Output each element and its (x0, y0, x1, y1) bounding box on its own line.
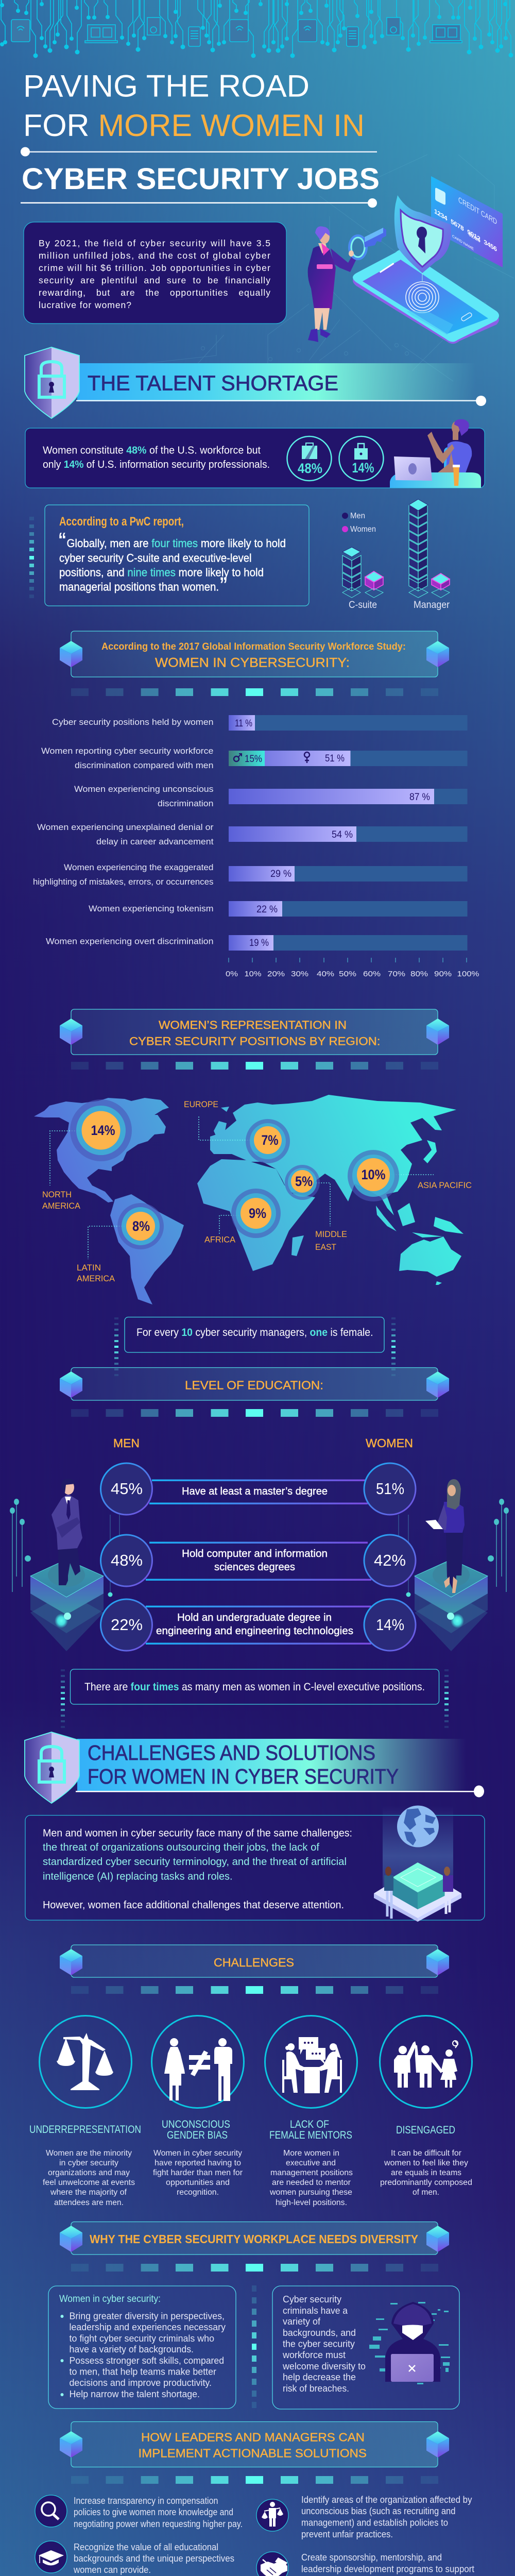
row: workforce discrimination (41, 746, 468, 770)
section heading: challenges and solutions: FOR WOMEN IN CYBER SECURITY (88, 1765, 399, 1788)
action: identify unconscious bias: Identify areas of the organization affected by (301, 2495, 472, 2505)
heading box: how leaders can implement solutions: IMPLEMENT ACTIONABLE SOLUTIONS (138, 2446, 367, 2460)
panel: PwC report quote: Globally, men are four times more likely to hold (67, 537, 286, 550)
education comparison: MEN (113, 1436, 140, 1450)
region labels: ASIA PACIFIC (418, 1180, 472, 1190)
panel: women in cyber security bullets: Bring greater diversity in perspectives, (69, 2311, 225, 2321)
action: compensation transparency (35, 2495, 243, 2529)
panel: workforce statistic (25, 419, 485, 488)
panel: cyber criminals text and hacker: variety of (283, 2316, 321, 2327)
panel: cyber criminals text and hacker: risk of breaches. (283, 2383, 349, 2394)
challenge: unconscious gender bias: fight harder than men for (153, 2168, 243, 2177)
icon: credit card: CARD NAME (452, 234, 474, 251)
row: workforce discrimination: Women reporting cyber security workforce (41, 746, 213, 756)
panel: shared challenges text: However, women face additional challenges that deserve attention. (43, 1900, 344, 1911)
panel: women in cyber security bullets: Women in cyber security: (59, 2294, 161, 2304)
title (21, 69, 380, 208)
row: exaggerated highlighting: highlighting of mistakes, errors, or occurrences (33, 877, 213, 887)
row: workforce discrimination: 15% (245, 754, 262, 765)
callout: North America 14% (70, 1099, 132, 1161)
callout: Latin America 8% (117, 1203, 164, 1249)
callout: North America 14%: 14% (91, 1123, 115, 1138)
icon: unbalanced scales (57, 2033, 113, 2090)
row: tokenism: Women experiencing tokenism (89, 904, 213, 913)
faint hero circuit lines (122, 155, 514, 381)
heading box: women in cybersecurity: According to the 2017 Global Information Security Workforce Study: (101, 641, 406, 652)
callout: Asia Pacific 10%: 10% (362, 1167, 385, 1182)
section heading: the talent shortage: THE TALENT SHORTAGE (88, 371, 338, 395)
row: workforce discrimination: discrimination compared with men (75, 760, 213, 770)
panel: intro text: security are plentiful and sure to be financially (39, 275, 270, 285)
axis (226, 958, 479, 978)
icon: colleagues high-fiving with excluded woman (394, 2041, 458, 2088)
challenge: lack of female mentors: women pursuing these (269, 2188, 352, 2197)
action: sponsorship and mentorship: leadership development programs to support (301, 2564, 474, 2574)
row: computer and information sciences: sciences degrees (214, 1562, 295, 1573)
challenge: underrepresentation: Women are the minority (46, 2149, 132, 2158)
callout: one in ten managers (114, 1317, 396, 1376)
panel: cyber criminals text and hacker: welcome diversity to (282, 2361, 366, 2371)
axis: 0% (226, 970, 238, 978)
row: unconscious discrimination: Women experiencing unconscious (74, 784, 213, 794)
panel: cyber criminals text and hacker (272, 2286, 459, 2409)
illustration: globe over chip with two figures (374, 1805, 461, 1922)
challenge: underrepresentation: organizations and may (48, 2168, 130, 2177)
axis: 70% (388, 970, 405, 978)
panel: cyber criminals text and hacker: Cyber security (283, 2294, 341, 2304)
action: educational backgrounds (35, 2541, 234, 2575)
heading box: why diversity (60, 2222, 449, 2255)
icon: handshake (256, 2552, 288, 2576)
row: overt discrimination (46, 935, 468, 951)
callout: Europe 7% (246, 1119, 290, 1163)
panel: women in cyber security bullets (48, 2286, 236, 2409)
heading box: women in cybersecurity: WOMEN IN CYBERSECURITY: (155, 655, 350, 670)
callout: Asia Pacific 10% (348, 1150, 399, 1201)
heading box: why diversity: WHY THE CYBER SECURITY WORKPLACE NEEDS DIVERSITY (90, 2232, 418, 2246)
callout: one in ten managers: For every 10 cyber security managers, one is female. (136, 1327, 373, 1338)
challenge: underrepresentation: where the majority of (50, 2188, 127, 2197)
panel: cyber criminals text and hacker: help decrease the (283, 2372, 356, 2382)
heading box: level of education (60, 1367, 449, 1400)
icon: shield with keyhole (394, 195, 451, 282)
action: identify unconscious bias: unconscious bias (such as recruiting and (301, 2506, 455, 2516)
circuit board band at top (0, 0, 513, 58)
heading box: how leaders can implement solutions (60, 2421, 449, 2467)
title: CYBER SECURITY JOBS (22, 162, 380, 196)
challenge: disengaged: It can be difficult for (391, 2149, 461, 2158)
panel: intro text: crime will hit $6 trillion. Job opportunities in cyber (39, 263, 270, 273)
row: exaggerated highlighting (33, 862, 468, 887)
challenge: unconscious gender bias: Women in cyber security (153, 2149, 242, 2158)
row: workforce discrimination: 51 % (325, 753, 345, 764)
axis: 90% (434, 970, 452, 978)
row: positions held: Cyber security positions held by women (52, 717, 213, 727)
illustration: woman on platform (415, 1479, 488, 1651)
row: overt discrimination: Women experiencing overt discrimination (46, 937, 213, 946)
row: tokenism: 22 % (256, 904, 278, 915)
axis: 30% (291, 970, 308, 978)
legend: Women (350, 525, 376, 534)
challenge: unconscious gender bias: recognition. (177, 2188, 219, 2197)
heading box: challenges: CHALLENGES (214, 1956, 294, 1969)
challenge: underrepresentation: attendees are men. (54, 2198, 124, 2207)
action: educational backgrounds: Recognize the value of all educational (74, 2542, 218, 2552)
row: exaggerated highlighting: 29 % (270, 869, 291, 879)
illustration: woman holding a key (308, 226, 386, 342)
panel: women in cyber security bullets: Possess stronger soft skills, compared (69, 2355, 224, 2366)
section heading: challenges and solutions (25, 1732, 484, 1803)
region labels: EAST (315, 1242, 336, 1252)
chart: C-suite and manager towers (342, 499, 450, 611)
challenge: disengaged: of men. (413, 2188, 439, 2197)
panel: PwC report quote: positions, and nine times more likely to hold (59, 566, 264, 579)
action: sponsorship and mentorship (256, 2552, 474, 2576)
manager men tower (409, 499, 428, 598)
callout: Europe 7%: 7% (262, 1132, 278, 1148)
heading box: challenges (60, 1945, 449, 1977)
panel: women in cyber security bullets: to fight cyber security criminals who (69, 2333, 214, 2344)
action: compensation transparency: negotiating power when requesting higher pay. (74, 2519, 243, 2529)
legend: Men (350, 512, 365, 520)
icon: woman not equal man (164, 2038, 232, 2101)
title: FOR MORE WOMEN IN (23, 108, 365, 143)
callout: Middle East 5% (285, 1165, 320, 1200)
row: exaggerated highlighting: Women experiencing the exaggerated (64, 862, 213, 872)
illustration: hooded hacker with laptop (369, 2302, 450, 2384)
axis: 100% (457, 970, 479, 978)
region labels: AMERICA (42, 1201, 81, 1211)
challenge: underrepresentation: UNDERREPRESENTATION (29, 2124, 141, 2136)
education comparison: WOMEN (366, 1436, 413, 1450)
row: master's degree: Have at least a master’s degree (182, 1486, 328, 1497)
icon: mentoring meeting with speech bubbles (282, 2037, 342, 2093)
panel: PwC report quote: managerial positions than women. (59, 580, 219, 594)
challenge: disengaged (380, 2015, 472, 2197)
region labels: AMERICA (77, 1274, 115, 1283)
action: compensation transparency: policies to give women more knowledge and (74, 2507, 233, 2517)
side circuit decoration (10, 1499, 509, 1592)
challenge: lack of female mentors: are needed to mentor (272, 2178, 351, 2187)
icon: 14% lock badge: 14% (352, 460, 374, 476)
panel: shared challenges text: intelligence (AI) replacing tasks and roles. (43, 1871, 233, 1883)
row: unconscious discrimination: 87 % (409, 792, 430, 803)
challenge: unconscious gender bias: opportunities and (166, 2178, 230, 2187)
row: unconscious discrimination: discrimination (158, 799, 213, 808)
panel: women in cyber security bullets: have a variety of backgrounds. (69, 2344, 194, 2354)
row: computer and information sciences (101, 1535, 416, 1586)
row: denial or delay: 54 % (332, 829, 353, 840)
panel: workforce statistic: Women constitute 48% of the U.S. workforce but (43, 445, 261, 456)
challenge: lack of female mentors: LACK OF (290, 2119, 329, 2130)
panel: PwC report quote: “ (58, 529, 66, 551)
continents (34, 1095, 464, 1304)
challenge: lack of female mentors (265, 2015, 357, 2207)
panel: women in cyber security bullets: to men, that help teams make better (69, 2367, 216, 2377)
panel: shared challenges text: the threat of organizations outsourcing their jobs, the lack of (43, 1842, 319, 1853)
row: positions held (52, 715, 468, 731)
challenge: disengaged: women to feel like they (384, 2159, 468, 2167)
panel: shared challenges text: standardized cyber security terminology, and the threat of artificial (43, 1856, 347, 1868)
region labels (42, 1099, 472, 1283)
panel: shared challenges text: Men and women in cyber security face many of the same challenges: (43, 1828, 352, 1839)
row: undergraduate engineering (101, 1599, 416, 1651)
axis: 60% (363, 970, 381, 978)
row: denial or delay: delay in career advancement (96, 837, 214, 846)
row: computer and information sciences: Hold computer and information (182, 1548, 328, 1560)
action: educational backgrounds: women can provide. (73, 2565, 151, 2575)
panel: PwC report quote: ” (219, 574, 228, 596)
panel: PwC report quote (29, 505, 309, 606)
panel: shared challenges text (25, 1805, 485, 1922)
panel: intro text: rewarding, but are the opportunities equally (39, 287, 270, 298)
callout: Africa 9% (231, 1189, 281, 1238)
challenge: unconscious gender bias: GENDER BIAS (167, 2129, 228, 2141)
icon: person holding scales (256, 2499, 288, 2531)
challenge: unconscious gender bias: have reported having to (154, 2159, 241, 2167)
C-suite men tower (342, 547, 361, 598)
icon: credit card: 1234 5678 9012 3456 (434, 207, 497, 253)
action: identify unconscious bias (256, 2495, 472, 2539)
panel: intro text: million unfilled jobs, and the cost of global cyber (39, 250, 270, 261)
icon: credit card (431, 176, 503, 267)
callout: four times as many men (61, 1669, 449, 1728)
C-suite women tower (365, 571, 383, 598)
row: positions held: 11 % (235, 718, 252, 729)
world map (34, 1095, 472, 1304)
region labels: MIDDLE (315, 1229, 347, 1239)
challenge: unconscious gender bias (151, 2015, 244, 2197)
illustration: man on platform (30, 1479, 104, 1651)
row: master's degree (101, 1463, 416, 1515)
row: overt discrimination: 19 % (249, 938, 269, 948)
heading box: representation by region: WOMEN’S REPRESENTATION IN (159, 1019, 347, 1031)
row: undergraduate engineering: 22% (111, 1616, 143, 1634)
panel: women in cyber security bullets: leadership and experiences necessary (69, 2322, 226, 2332)
heading box: representation by region (60, 1009, 449, 1055)
panel: cyber criminals text and hacker: workforce must (282, 2350, 346, 2360)
manager women tower (432, 573, 450, 598)
action: sponsorship and mentorship: Create sponsorship, mentorship, and (301, 2552, 442, 2563)
callout: Africa 9%: 9% (249, 1206, 266, 1221)
panel: women in cyber security bullets: Help narrow the talent shortage. (69, 2389, 200, 2399)
challenge: lack of female mentors: FEMALE MENTORS (269, 2129, 352, 2141)
challenge: lack of female mentors: executive and (286, 2159, 336, 2167)
panel: cyber criminals text and hacker: the cyber security (283, 2339, 355, 2349)
row: master's degree: 45% (111, 1480, 143, 1498)
dotted connectors (50, 1115, 434, 1259)
action: identify unconscious bias: prevent unfair practices. (301, 2529, 393, 2539)
row: tokenism (89, 901, 468, 917)
axis: 20% (267, 970, 285, 978)
challenge: disengaged: DISENGAGED (396, 2124, 455, 2136)
region labels: LATIN (77, 1263, 101, 1273)
row: denial or delay: Women experiencing unexplained denial or (37, 822, 214, 832)
education comparison (101, 1436, 416, 1651)
panel: intro text (24, 222, 286, 324)
title: PAVING THE ROAD (23, 69, 310, 103)
row: undergraduate engineering: engineering and engineering technologies (156, 1625, 353, 1637)
challenge: underrepresentation (29, 2015, 141, 2207)
section heading: the talent shortage (25, 347, 486, 418)
panel: cyber criminals text and hacker: backgrounds, and (283, 2328, 356, 2338)
axis: 10% (244, 970, 262, 978)
row: undergraduate engineering: 14% (376, 1616, 404, 1634)
action: compensation transparency: Increase transparency in compensation (74, 2496, 218, 2506)
bar chart: women in cybersecurity (33, 715, 479, 978)
row: unconscious discrimination (74, 784, 468, 808)
challenge: lack of female mentors: management positions (270, 2168, 353, 2177)
challenge: lack of female mentors: high-level positions. (276, 2198, 347, 2207)
icon: credit card: 02/28 (469, 232, 480, 244)
region labels: AFRICA (204, 1234, 236, 1245)
row: undergraduate engineering: Hold an undergraduate degree in (177, 1612, 332, 1623)
icon: smartphone with fingerprint (353, 249, 499, 344)
icon: graduation cap (35, 2541, 67, 2573)
axis: 80% (410, 970, 428, 978)
icon: 48% briefcase badge (287, 436, 332, 481)
challenge: disengaged: are equals in teams (391, 2168, 461, 2177)
row: master's degree: 51% (376, 1480, 404, 1498)
heading box: level of education: LEVEL OF EDUCATION: (185, 1379, 323, 1392)
row: denial or delay (37, 822, 468, 846)
panel: workforce statistic: only 14% of U.S. information security professionals. (43, 459, 270, 470)
heading box: women in cybersecurity (60, 631, 449, 677)
legend (342, 512, 376, 534)
heading box: how leaders can implement solutions: HOW LEADERS AND MANAGERS CAN (141, 2431, 365, 2444)
challenge: lack of female mentors: More women in (283, 2149, 339, 2158)
action: identify unconscious bias: management) and establish policies to (301, 2517, 448, 2528)
region labels: NORTH (42, 1190, 72, 1199)
icon: credit card: CREDIT CARD (458, 195, 497, 227)
panel: intro text: lucrative for women? (39, 300, 131, 310)
challenge: underrepresentation: feel unwelcome at events (43, 2178, 135, 2187)
panel: women in cyber security bullets: decisions and improve productivity. (69, 2378, 212, 2388)
section heading: challenges and solutions: CHALLENGES AND SOLUTIONS (88, 1741, 375, 1765)
action: educational backgrounds: backgrounds and the unique perspectives (74, 2553, 234, 2564)
panel: PwC report quote: cyber security C-suite and executive-level (59, 551, 251, 565)
heading box: representation by region: CYBER SECURITY POSITIONS BY REGION: (129, 1035, 380, 1048)
panel: intro text: By 2021, the field of cyber security will have 3.5 (39, 238, 270, 248)
icon: magnifying glass (35, 2495, 67, 2527)
chart: C-suite and manager towers: Manager (414, 600, 450, 611)
illustration: woman at laptop (390, 419, 481, 488)
callout: four times as many men: There are four times as many men as women in C-level executive positions. (84, 1681, 425, 1693)
callout: Middle East 5%: 5% (295, 1174, 313, 1189)
row: computer and information sciences: 42% (374, 1551, 406, 1569)
region labels: EUROPE (184, 1099, 218, 1109)
panel: PwC report quote: According to a PwC report, (59, 515, 184, 529)
panel: cyber criminals text and hacker: criminals have a (283, 2306, 348, 2316)
icon: 48% briefcase badge: 48% (298, 461, 322, 476)
axis: 40% (317, 970, 334, 978)
chart: C-suite and manager towers: C-suite (349, 600, 377, 611)
challenge: unconscious gender bias: UNCONSCIOUS (162, 2119, 230, 2130)
row: computer and information sciences: 48% (111, 1551, 143, 1569)
icon: 14% lock badge (339, 436, 383, 481)
axis: 50% (339, 970, 356, 978)
hero illustration: credit card, shield, phone, woman with key (308, 176, 503, 344)
challenge: disengaged: predominantly composed (380, 2178, 472, 2187)
challenge: underrepresentation: in cyber security (59, 2159, 118, 2167)
callout: Latin America 8%: 8% (132, 1218, 150, 1234)
